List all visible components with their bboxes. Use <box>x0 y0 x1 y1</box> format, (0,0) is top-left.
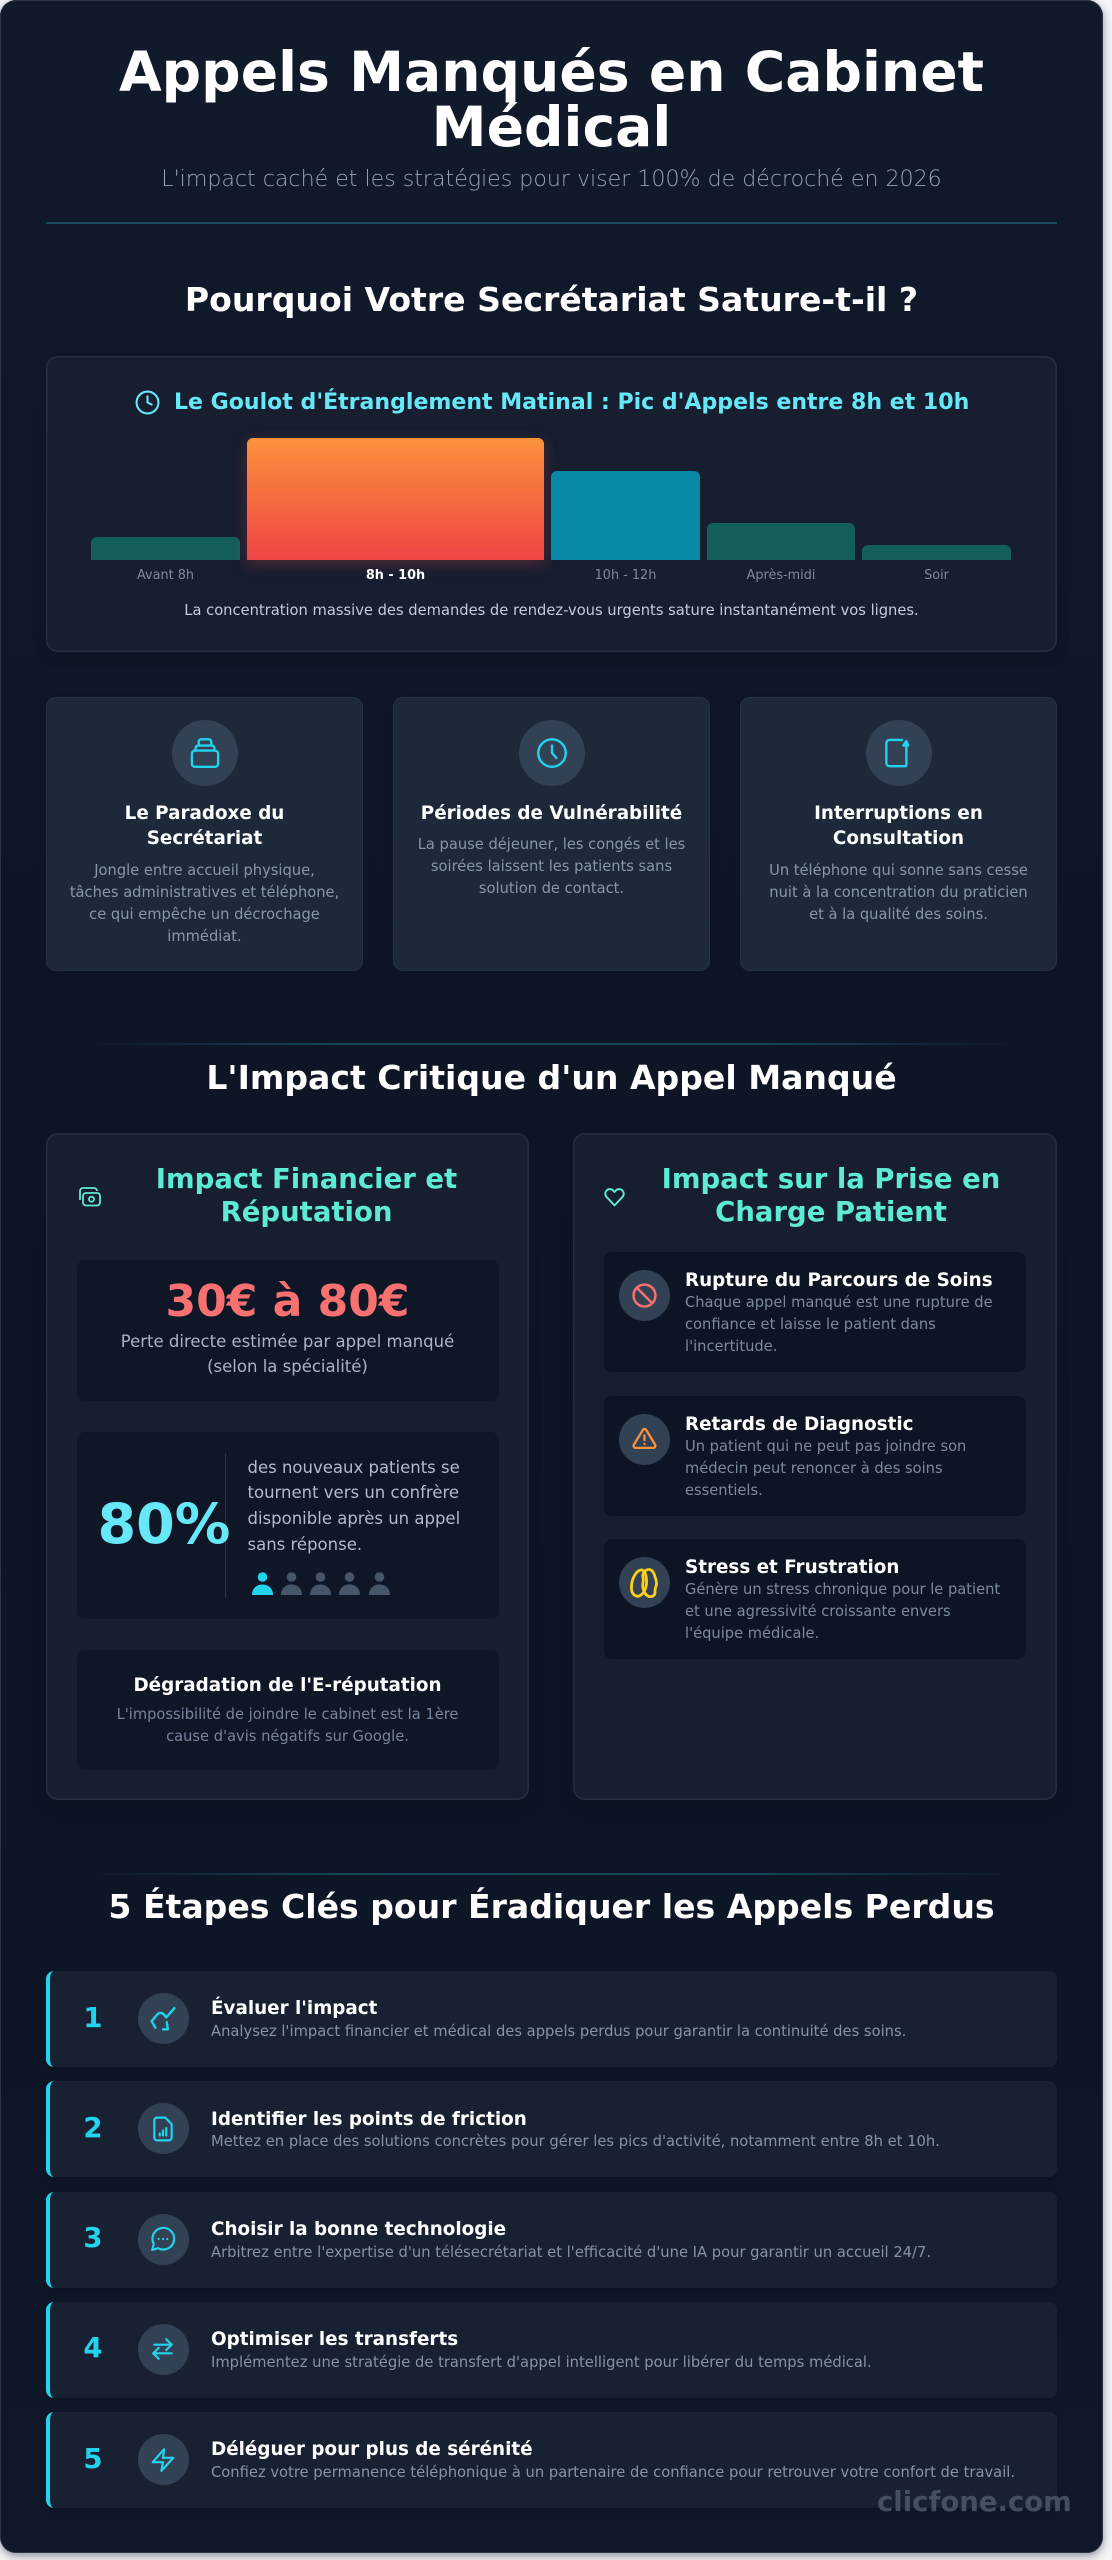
step 3 <box>46 2192 1057 2288</box>
icon: tablet note <box>866 720 932 786</box>
icon: person <box>339 1572 360 1595</box>
stat text: des nouveaux patients se <box>248 1458 460 1476</box>
card title: Interruptions en <box>814 803 983 824</box>
title <box>119 41 984 160</box>
box text: L'impossibilité de joindre le cabinet est la 1ère <box>117 1706 458 1723</box>
icon: file chart <box>138 2103 189 2154</box>
text box: e-réputation <box>76 1650 498 1770</box>
pictogram: one of five people <box>252 1572 390 1595</box>
item text: Un patient qui ne peut pas joindre son <box>685 1438 966 1454</box>
box text <box>117 1706 458 1745</box>
label: après-midi: Après-midi <box>747 568 815 582</box>
card title: Secrétariat <box>147 828 262 849</box>
panel heading <box>662 1163 1000 1228</box>
step text: Arbitrez entre l'expertise d'un télésecrétariat et l'efficacité d'une IA pour garantir un accueil 24/7. <box>211 2244 931 2260</box>
panel: le paradoxe du secrétariat <box>46 697 363 971</box>
chart title: Le Goulot d'Étranglement Matinal : Pic d'Appels entre 8h et 10h <box>174 390 969 415</box>
icon: lightning <box>138 2434 189 2485</box>
bar: 8h-10h <box>247 438 544 560</box>
heading: impact critique: L'Impact Critique d'un Appel Manqué <box>206 1058 897 1097</box>
icon: gauge <box>138 1993 189 2044</box>
panel: interruptions en consultation <box>740 697 1057 971</box>
stat value: 30€ à 80€ <box>165 1276 410 1327</box>
bar: soir <box>862 545 1011 560</box>
card text: et à la qualité des soins. <box>809 906 988 922</box>
icon: clock <box>518 720 584 786</box>
icon: ban <box>619 1270 670 1321</box>
stat text: sans réponse. <box>248 1535 362 1554</box>
card title: Consultation <box>833 828 964 849</box>
watermark: clicfone.com <box>877 2486 1072 2518</box>
stat text <box>248 1458 460 1554</box>
item text: l'équipe médicale. <box>685 1625 819 1642</box>
box title: Dégradation de l'E-réputation <box>133 1674 442 1696</box>
panel: impact financier <box>46 1133 529 1800</box>
step number: 2 <box>83 2112 103 2144</box>
item text: l'incertitude. <box>685 1338 777 1355</box>
panel: impact patient <box>573 1133 1057 1800</box>
step title: Optimiser les transferts <box>211 2329 458 2350</box>
step 4 <box>46 2302 1057 2398</box>
heading: pourquoi: Pourquoi Votre Secrétariat Sature-t-il ? <box>185 280 918 319</box>
step number: 5 <box>83 2442 103 2474</box>
step text: Analysez l'impact financier et médical des appels perdus pour garantir la continuité des soins. <box>211 2023 906 2040</box>
icon: clock <box>136 390 160 414</box>
bar: avant 8h <box>91 537 240 560</box>
icon: stacked layers <box>172 720 238 786</box>
icon: message <box>138 2214 189 2264</box>
panel heading: Réputation <box>221 1196 392 1228</box>
title: Appels Manqués en Cabinet <box>119 41 984 105</box>
step title: Identifier les points de friction <box>211 2109 527 2130</box>
step number: 4 <box>83 2332 103 2364</box>
label: 10h-12h: 10h - 12h <box>595 568 656 582</box>
step 2 <box>46 2081 1057 2177</box>
icon: heart <box>604 1188 625 1206</box>
icon: warning triangle <box>619 1414 670 1464</box>
bar chart <box>91 434 1011 582</box>
card text: ce qui empêche un décrochage <box>89 906 320 922</box>
item: rupture <box>604 1252 1026 1372</box>
panel heading: Impact sur la Prise en <box>662 1163 1000 1195</box>
icon: banknotes <box>79 1187 101 1206</box>
item text: médecin peut renoncer à des soins <box>685 1460 943 1476</box>
heading: 5 étapes: 5 Étapes Clés pour Éradiquer les Appels Perdus <box>108 1887 995 1926</box>
step number: 3 <box>83 2222 103 2254</box>
title: Médical <box>432 96 671 160</box>
stat box: cost per call <box>76 1260 498 1401</box>
item: stress <box>604 1539 1026 1659</box>
card text: solution de contact. <box>479 880 624 896</box>
card text <box>418 836 685 896</box>
item title: Retards de Diagnostic <box>685 1414 914 1434</box>
step text: Mettez en place des solutions concrètes pour gérer les pics d'activité, notamment entre 8h et 10h. <box>211 2133 940 2150</box>
bar: 10h-12h <box>551 471 700 560</box>
card text: immédiat. <box>167 928 242 944</box>
item title: Rupture du Parcours de Soins <box>685 1270 993 1291</box>
label: soir: Soir <box>924 568 949 582</box>
step number: 1 <box>83 2002 103 2034</box>
item text: Chaque appel manqué est une rupture de <box>685 1294 993 1311</box>
stat caption <box>121 1332 454 1376</box>
step 1 <box>46 1971 1057 2067</box>
panel: périodes de vulnérabilité <box>393 697 710 971</box>
subtitle: L'impact caché et les stratégies pour viser 100% de décroché en 2026 <box>161 166 942 192</box>
chart heading <box>136 388 969 415</box>
step title: Évaluer l'impact <box>211 1998 377 2019</box>
card title: Le Paradoxe du <box>125 803 284 824</box>
step text: Implémentez une stratégie de transfert d'appel intelligent pour libérer du temps médical. <box>211 2354 872 2371</box>
item text: essentiels. <box>685 1482 763 1498</box>
item text <box>685 1294 993 1355</box>
icon: person <box>281 1572 302 1595</box>
card text: nuit à la concentration du praticien <box>769 884 1028 900</box>
step text: Confiez votre permanence téléphonique à un partenaire de confiance pour retrouver votre confort de travail. <box>211 2464 1015 2481</box>
card text <box>769 862 1028 922</box>
icon: person <box>369 1572 390 1595</box>
stat text: disponible après un appel <box>248 1509 460 1528</box>
item text: confiance et laisse le patient dans <box>685 1316 936 1333</box>
card text: tâches administratives et téléphone, <box>70 884 339 900</box>
icon: person <box>310 1572 331 1595</box>
card title: Périodes de Vulnérabilité <box>421 803 682 824</box>
card title <box>814 803 983 849</box>
panel heading <box>156 1163 457 1228</box>
chart caption: La concentration massive des demandes de rendez-vous urgents sature instantanément vos lignes. <box>184 602 919 619</box>
stat box: 80 percent <box>76 1432 498 1619</box>
stat caption: Perte directe estimée par appel manqué <box>121 1332 454 1350</box>
icon: brain <box>619 1557 670 1608</box>
card text <box>70 862 339 944</box>
bar: après-midi <box>707 523 855 560</box>
card text: Jongle entre accueil physique, <box>94 862 315 878</box>
stat value: 80% <box>98 1492 230 1557</box>
step title: Choisir la bonne technologie <box>211 2219 506 2240</box>
card text: Un téléphone qui sonne sans cesse <box>769 862 1028 878</box>
panel heading: Charge Patient <box>715 1196 947 1228</box>
step title: Déléguer pour plus de sérénité <box>211 2439 533 2460</box>
stat text: tournent vers un confrère <box>248 1483 459 1502</box>
icon: transfer arrows <box>138 2324 189 2375</box>
step 5 <box>46 2412 1057 2508</box>
icon: person highlighted <box>252 1572 273 1595</box>
card title <box>125 803 284 849</box>
item: retards <box>604 1396 1026 1516</box>
panel: peak call chart <box>46 356 1057 652</box>
panel heading: Impact Financier et <box>156 1163 457 1195</box>
item text <box>685 1581 1000 1642</box>
card text: soirées laissent les patients sans <box>431 858 672 874</box>
card text: La pause déjeuner, les congés et les <box>418 836 685 852</box>
item text: et une agressivité croissante envers <box>685 1603 951 1620</box>
item title: Stress et Frustration <box>685 1557 899 1578</box>
item text: Génère un stress chronique pour le patient <box>685 1581 1000 1598</box>
label: 8h-10h: 8h - 10h <box>366 568 425 582</box>
label: avant 8h: Avant 8h <box>137 568 194 582</box>
item text <box>685 1438 966 1498</box>
stat caption: (selon la spécialité) <box>207 1357 368 1376</box>
box text: cause d'avis négatifs sur Google. <box>166 1728 409 1745</box>
